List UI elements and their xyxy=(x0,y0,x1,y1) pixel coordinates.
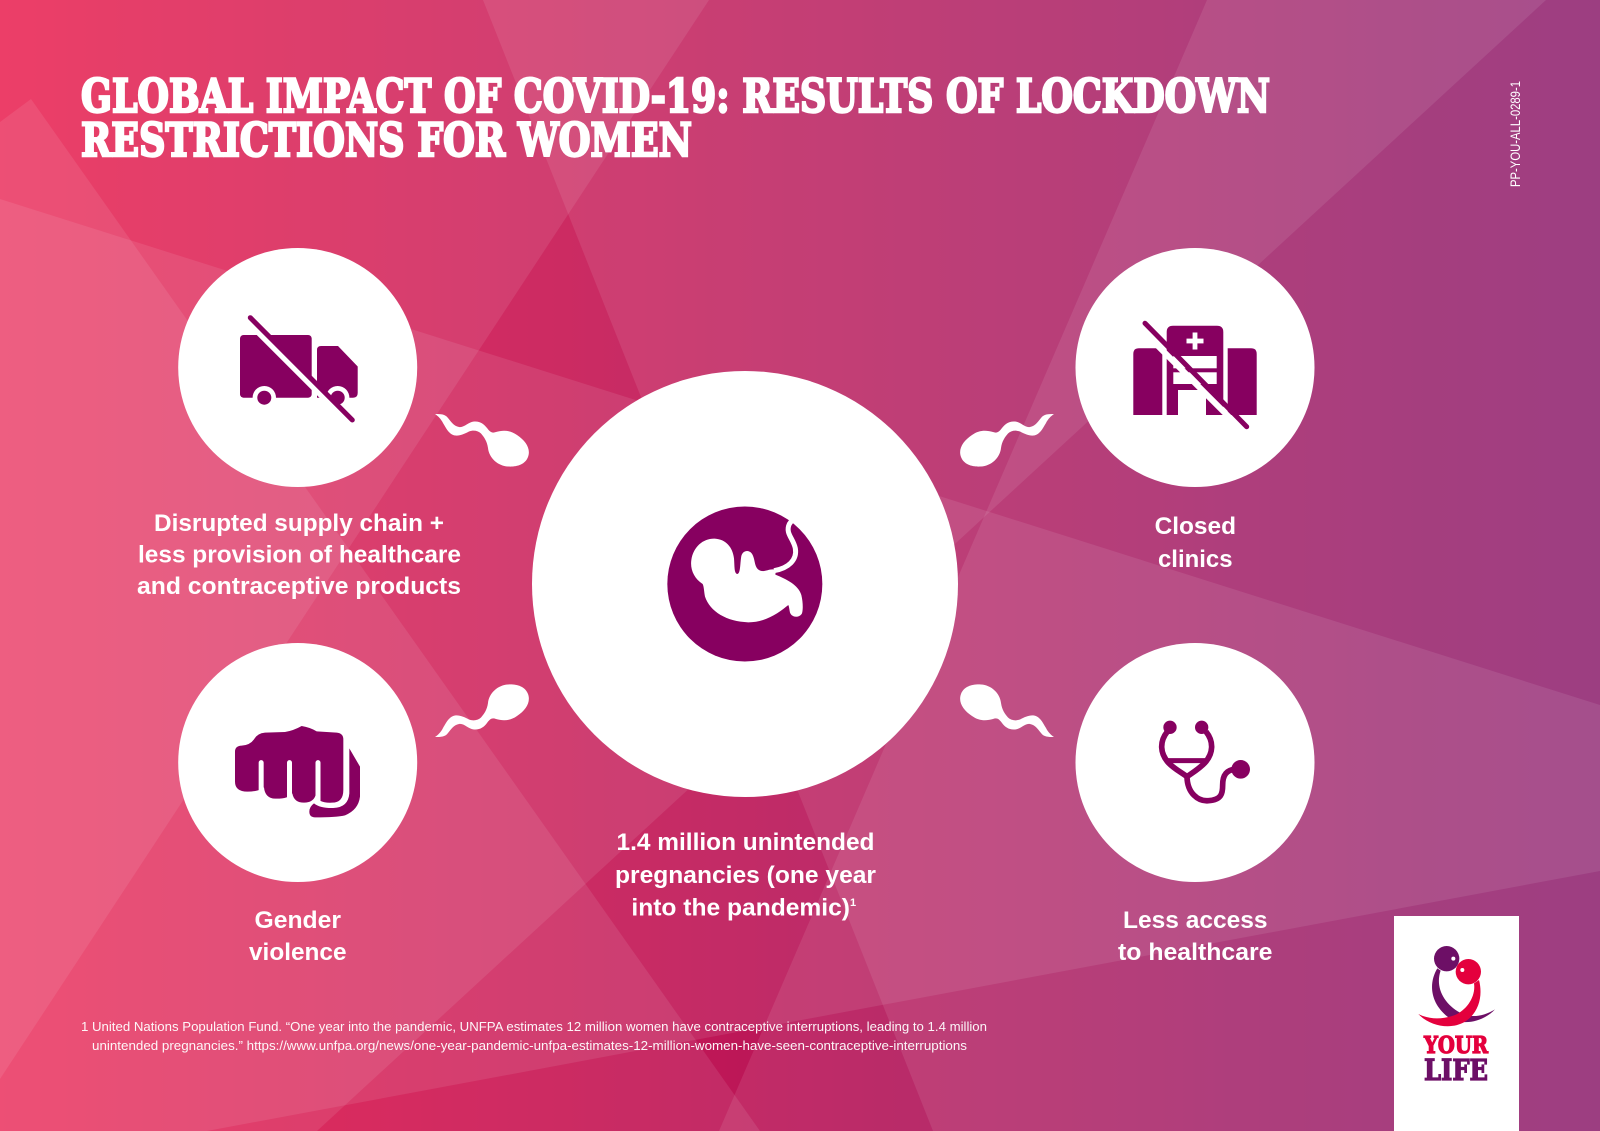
label: 1.4 million unintended pregnancies: into the pandemic) xyxy=(631,894,850,922)
label: disrupted supply chain: and contraceptive products xyxy=(137,573,461,600)
panel: less access to healthcare xyxy=(1076,643,1314,966)
icon: embryo xyxy=(667,506,822,661)
panel: closed clinics xyxy=(1076,248,1314,573)
arrow: sperm toward centre, top left xyxy=(435,414,529,467)
panel: gender violence xyxy=(178,643,417,966)
label: less access to healthcare: to healthcare xyxy=(1118,939,1272,966)
title xyxy=(81,69,1270,167)
label: gender violence: Gender xyxy=(254,907,341,934)
label: gender violence xyxy=(249,907,346,966)
icon: crossed-out truck xyxy=(240,318,358,420)
arrow: sperm toward centre, bottom left xyxy=(435,684,529,737)
footnote: 1 xyxy=(81,1019,88,1034)
document reference code: PP-YOU-ALL-0289-1 xyxy=(1508,81,1523,187)
icon: stethoscope xyxy=(1162,721,1250,801)
label: disrupted supply chain: less provision of healthcare xyxy=(138,542,461,568)
logo wordmark: YOUR xyxy=(1423,1031,1488,1059)
panel: disrupted supply chain xyxy=(137,248,461,600)
panel: central unintended pregnancies xyxy=(532,371,958,922)
footnote xyxy=(81,1019,987,1053)
label: closed clinics xyxy=(1155,513,1236,573)
arrow: sperm toward centre, top right xyxy=(960,414,1054,467)
logo mark: two embracing figures xyxy=(1418,946,1495,1026)
icon: crossed-out hospital xyxy=(1133,323,1257,428)
arrow: sperm toward centre, bottom right xyxy=(960,684,1054,737)
label: 1.4 million unintended pregnancies: 1.4 million unintended xyxy=(616,829,874,856)
icon: fist xyxy=(235,726,360,817)
label: 1.4 million unintended pregnancies: 1 xyxy=(850,897,856,909)
label: gender violence: violence xyxy=(249,939,346,966)
title: GLOBAL IMPACT OF COVID-19: RESULTS OF LOCKDOWN xyxy=(81,69,1270,123)
label: closed clinics: Closed xyxy=(1155,513,1236,540)
label: disrupted supply chain: Disrupted supply chain + xyxy=(154,510,444,537)
label: closed clinics: clinics xyxy=(1158,546,1232,573)
label: 1.4 million unintended pregnancies: pregnancies (one year xyxy=(615,862,876,889)
label: 1.4 million unintended pregnancies xyxy=(615,829,876,922)
logo panel: Your Life xyxy=(1394,916,1519,1131)
label: less access to healthcare: Less access xyxy=(1123,907,1268,934)
label: less access to healthcare xyxy=(1118,907,1272,966)
logo wordmark: LIFE xyxy=(1424,1053,1488,1087)
footnote: United Nations Population Fund. “One year into the pandemic, UNFPA estimates 12 million women have contraceptive interruptions, leading to 1.4 million xyxy=(92,1019,987,1034)
footnote: unintended pregnancies.” https://www.unfpa.org/news/one-year-pandemic-unfpa-estimates-12-million-women-have-seen-contraceptive-interruptions xyxy=(92,1038,967,1053)
title: RESTRICTIONS FOR WOMEN xyxy=(81,113,692,167)
logo wordmark xyxy=(1423,1031,1488,1087)
label: disrupted supply chain xyxy=(137,510,461,600)
